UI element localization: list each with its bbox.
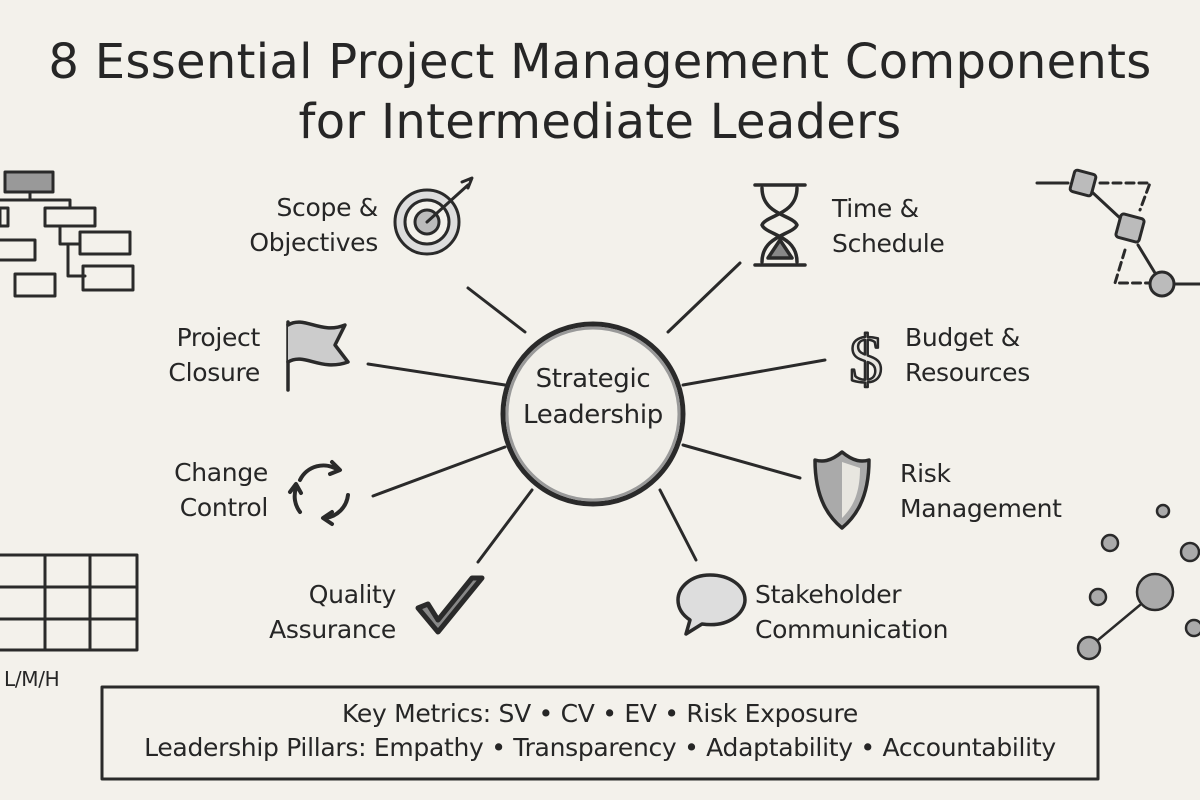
icon: hourglass: [755, 185, 805, 265]
spokes: [368, 263, 825, 562]
bottom text: Leadership Pillars: Empathy • Transparency • Adaptability • Accountability: [144, 733, 1056, 762]
title: [48, 34, 1152, 150]
label: change: [174, 458, 268, 522]
hub label: Strategic: [536, 364, 650, 394]
label: scope: Objectives: [249, 228, 378, 257]
label: closure: [168, 323, 260, 387]
label: change: Change: [174, 458, 268, 487]
label: risk: Risk: [900, 459, 951, 488]
label: change: Control: [180, 493, 268, 522]
icon: target: [395, 178, 472, 254]
bottom text: [144, 699, 1056, 762]
label: risk: Management: [900, 494, 1062, 523]
title: 8 Essential Project Management Components: [48, 34, 1152, 90]
decoration: org chart: [0, 172, 133, 296]
label: quality: [269, 580, 396, 644]
label: stakeholder: Stakeholder: [755, 580, 901, 609]
icon: speech bubble: [678, 575, 745, 634]
label: budget: [905, 323, 1030, 387]
label: time: Time &: [832, 194, 919, 223]
label: risk: [900, 459, 1062, 523]
icon: checkmark: [418, 578, 482, 632]
label: closure: Project: [177, 323, 260, 352]
icon: shield: [815, 452, 869, 528]
bottom box: [102, 687, 1098, 779]
hub circle: [503, 324, 683, 504]
label: scope: Scope &: [276, 193, 378, 222]
grid label: L/M/H: [4, 667, 59, 691]
title: for Intermediate Leaders: [298, 94, 901, 150]
label: stakeholder: Communication: [755, 615, 948, 644]
decoration: process nodes: [1037, 170, 1200, 296]
icon: cycle arrows: [290, 462, 348, 524]
label: time: Schedule: [832, 229, 944, 258]
decoration: network dots: [1078, 505, 1200, 659]
label: time: [832, 194, 944, 258]
label: stakeholder: [755, 580, 948, 644]
label: quality: Assurance: [269, 615, 396, 644]
label: closure: Closure: [168, 358, 260, 387]
hub label: Leadership: [523, 400, 663, 430]
hub label: [523, 364, 663, 430]
label: budget: Budget &: [905, 323, 1020, 352]
decoration: risk grid: [0, 555, 137, 650]
bottom text: Key Metrics: SV • CV • EV • Risk Exposure: [342, 699, 858, 728]
label: scope: [249, 193, 378, 257]
label: budget: Resources: [905, 358, 1030, 387]
label: quality: Quality: [309, 580, 396, 609]
icon: flag: [288, 322, 348, 390]
icon: dollar: $: [849, 321, 883, 397]
